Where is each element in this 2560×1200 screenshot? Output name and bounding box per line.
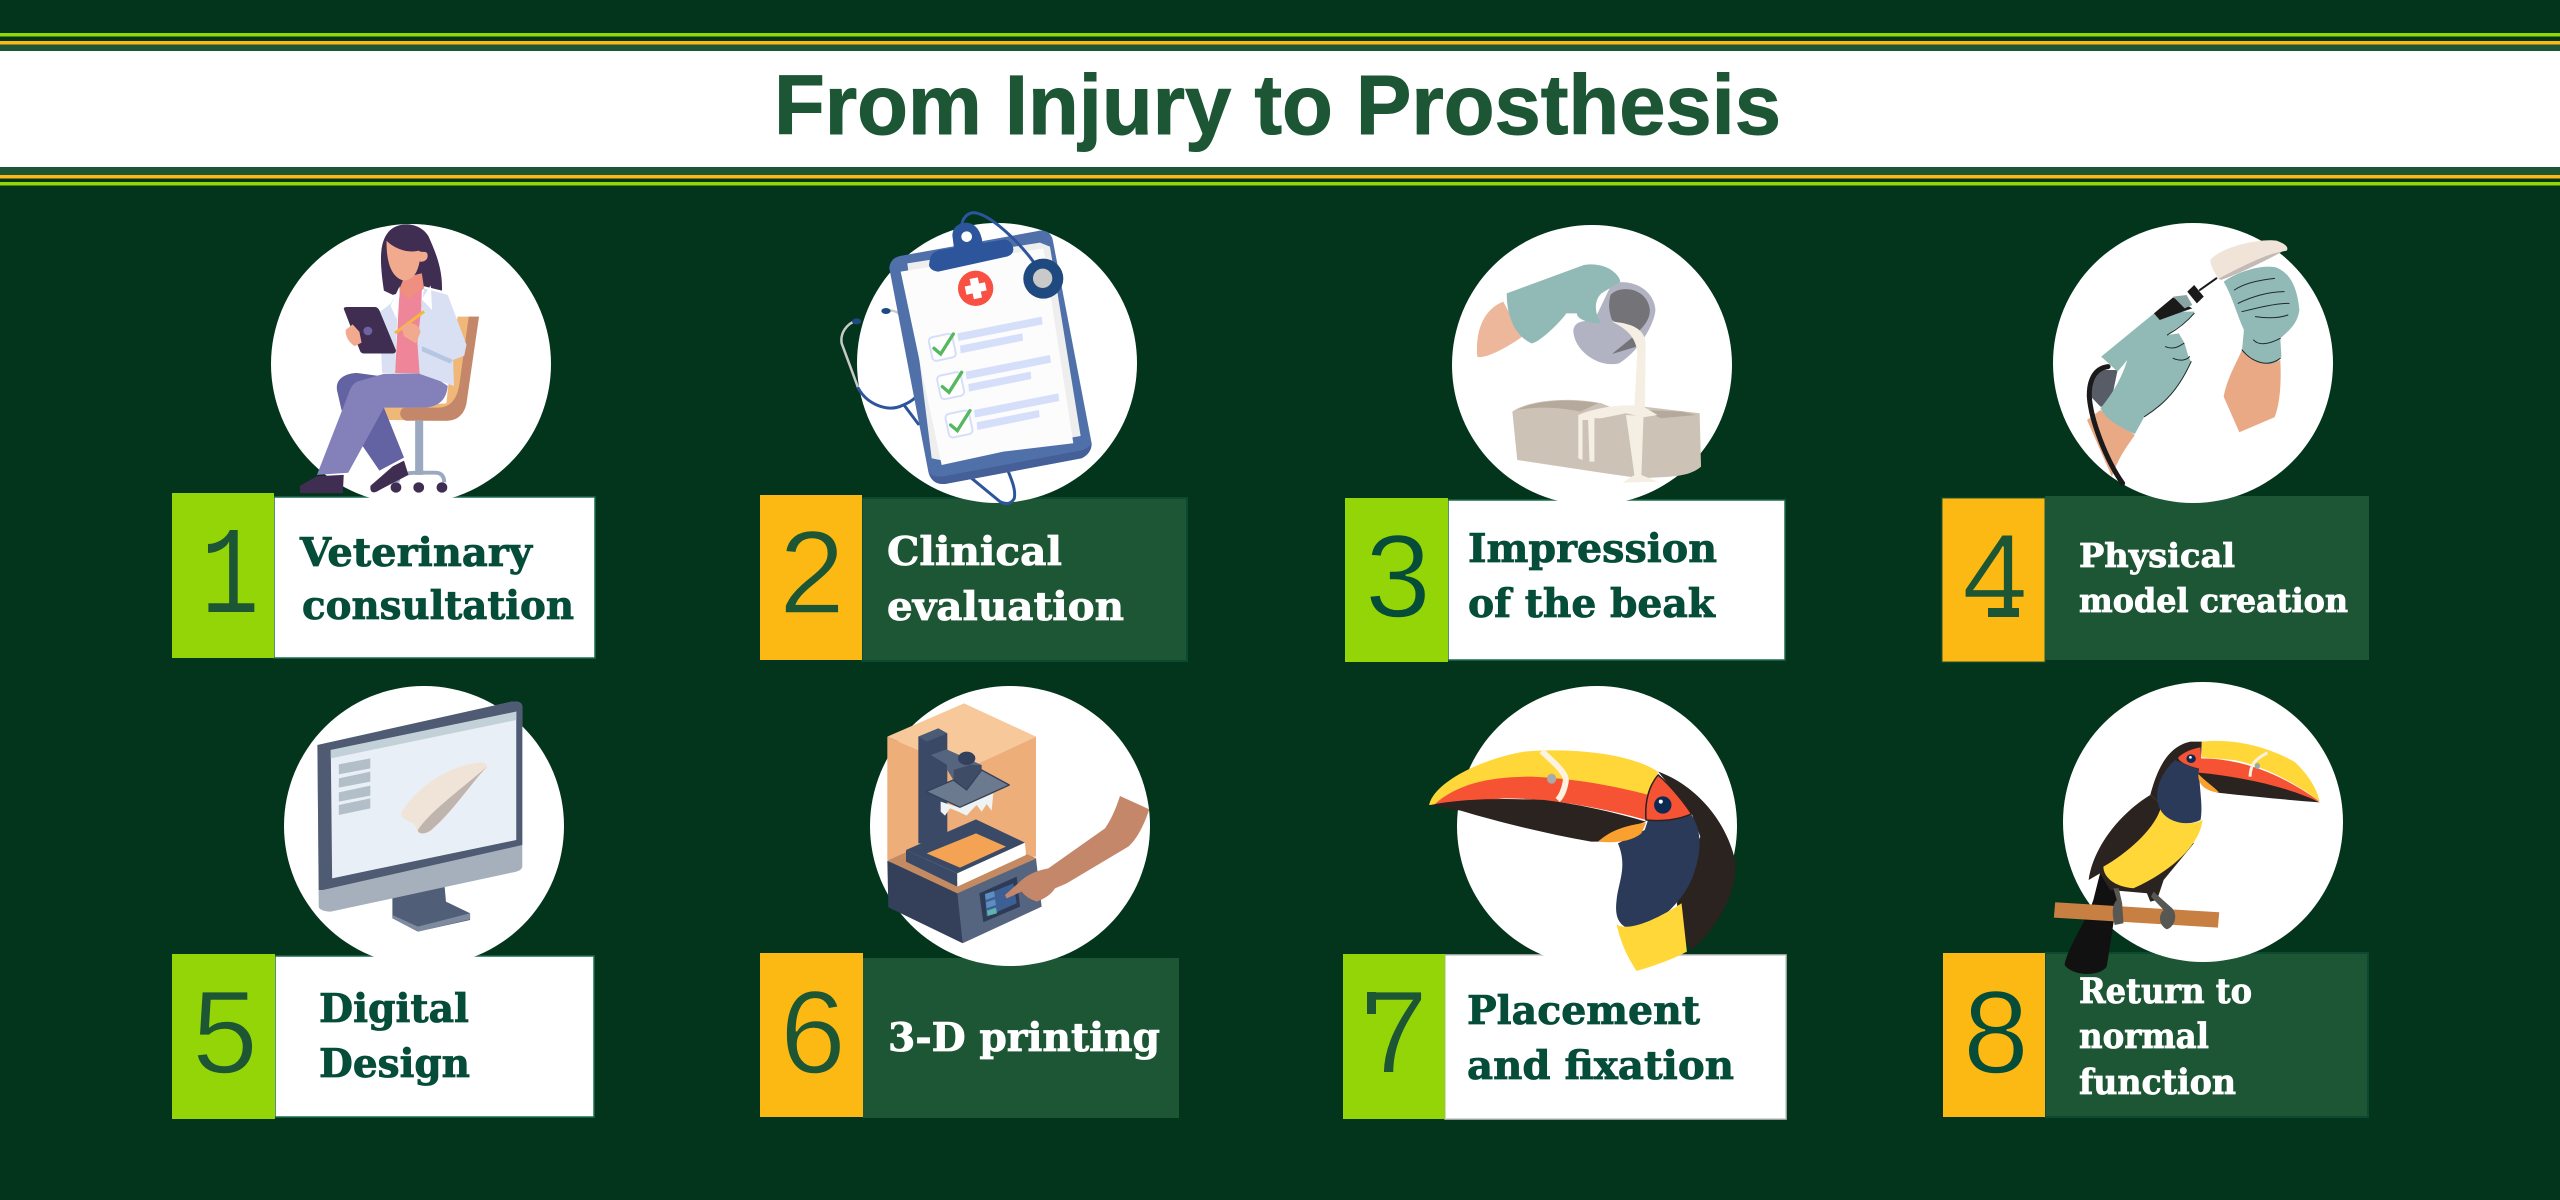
number 6: 6 — [780, 967, 846, 1099]
number 2: 2 — [779, 507, 845, 639]
step 2: clinical evaluation — [760, 213, 1187, 661]
label: Impression of the beak: Impression — [1468, 526, 1717, 572]
icon: veterinarian seated with tablet — [300, 224, 479, 493]
label: Veterinary consultation: consultation — [302, 583, 574, 629]
step 4: physical model creation — [1942, 223, 2369, 662]
number 5: 5 — [192, 967, 258, 1099]
label: Clinical evaluation: Clinical — [887, 529, 1062, 575]
icon: clipboard with stethoscope — [841, 213, 1092, 504]
label: Placement and fixation: and fixation — [1467, 1043, 1734, 1089]
title: From Injury to Prosthesis — [774, 58, 1781, 152]
label: Return to normal function: Return to — [2079, 971, 2252, 1012]
label: Placement and fixation: Placement — [1467, 988, 1700, 1034]
step 3: impression of the beak — [1345, 225, 1785, 662]
label: Veterinary consultation: Veterinary — [299, 530, 533, 576]
label: Clinical evaluation: evaluation — [887, 584, 1124, 630]
label: Return to normal function: function — [2079, 1062, 2236, 1103]
label: Physical model creation: model creation — [2079, 581, 2348, 620]
icon: gloved hands shaping beak model — [2087, 240, 2299, 483]
label: Digital Design: Digital — [319, 986, 469, 1032]
icon: toucan perched on branch — [2054, 741, 2320, 974]
title banner — [0, 51, 2560, 167]
number 1: 1 — [201, 509, 259, 650]
number 4: 4 — [1962, 510, 2028, 642]
label: Physical model creation: Physical — [2079, 536, 2235, 575]
step 7: placement and fixation — [1343, 686, 1786, 1119]
icon: monitor showing beak model — [317, 701, 522, 932]
number 8: 8 — [1963, 967, 2029, 1099]
label: Impression of the beak: of the beak — [1468, 581, 1716, 627]
label: Return to normal function: normal — [2079, 1016, 2209, 1057]
label: Digital Design: Design — [319, 1041, 470, 1087]
icon: toucan head with fixed beak — [1429, 750, 1735, 971]
number 3: 3 — [1365, 511, 1431, 643]
icon: plaster poured into mould — [1477, 264, 1701, 483]
label: 3-D printing: 3-D printing — [888, 1015, 1160, 1061]
step 1: veterinary consultation — [172, 224, 595, 658]
step 6: 3-D printing — [760, 686, 1179, 1118]
number 7: 7 — [1362, 967, 1428, 1099]
icon: resin 3-D printer — [887, 703, 1149, 943]
step 5: digital design — [172, 686, 594, 1119]
step 8: return to normal function — [1943, 682, 2368, 1117]
